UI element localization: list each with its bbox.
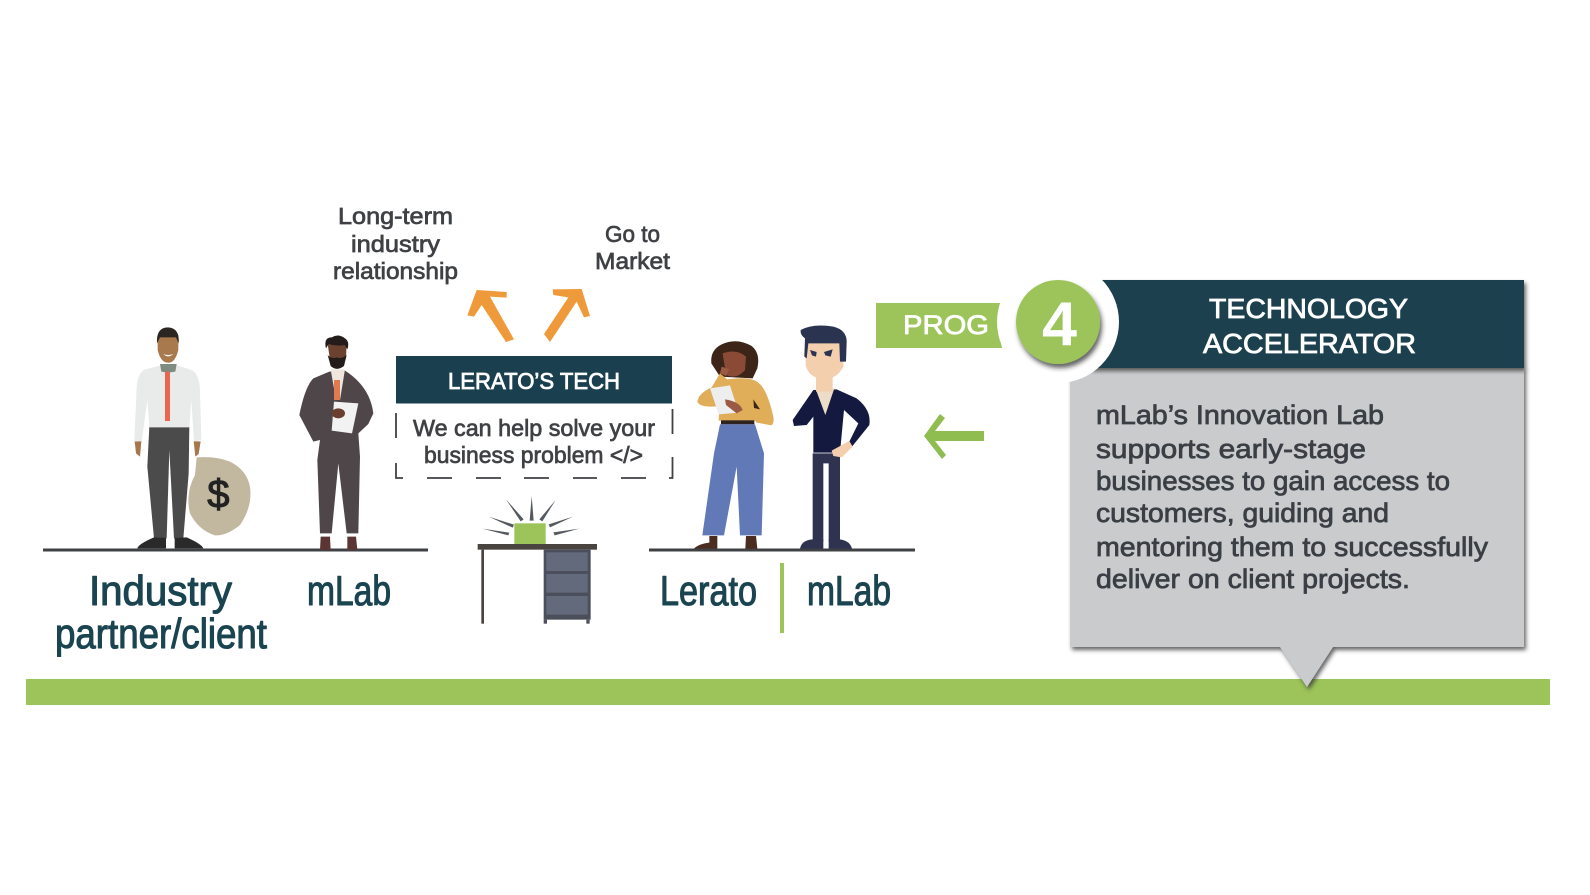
hands xyxy=(135,441,201,457)
head xyxy=(327,342,347,364)
suit xyxy=(299,371,373,533)
sweater fold xyxy=(753,399,760,409)
smile xyxy=(163,354,173,356)
hair xyxy=(801,326,847,362)
belt xyxy=(721,420,754,424)
label: mLab left: mLab xyxy=(307,567,391,614)
shoes xyxy=(320,537,357,550)
feet xyxy=(694,536,757,549)
text: long-term industry relationship: relationship xyxy=(333,258,458,284)
title: TECHNOLOGY xyxy=(1209,293,1408,324)
arrow: green left xyxy=(924,414,984,459)
hand xyxy=(332,408,345,418)
shirt xyxy=(817,388,834,415)
body text: supports early-stage xyxy=(1096,434,1366,464)
banner: PROG: PROG xyxy=(903,310,989,340)
green baseline bar xyxy=(26,679,1550,705)
green box xyxy=(514,523,546,544)
shoes xyxy=(137,537,203,548)
label: mLab right: mLab xyxy=(807,567,891,614)
dashed box xyxy=(396,409,672,478)
shirt and tie xyxy=(331,369,345,400)
body text: deliver on client projects. xyxy=(1096,564,1410,594)
label: Industry partner/client xyxy=(55,567,267,657)
label: Industry partner/client: Industry xyxy=(89,567,232,614)
text: go to market: Go to xyxy=(605,221,660,247)
body text: customers, guiding and xyxy=(1096,498,1389,528)
neck xyxy=(816,375,833,392)
hand xyxy=(832,441,853,457)
face xyxy=(723,351,746,377)
jacket xyxy=(793,389,870,453)
text: we can help: We can help solve your xyxy=(413,415,655,441)
arrow: up right xyxy=(544,289,590,342)
header: Lerato's tech: LERATO’S TECH xyxy=(448,368,620,394)
panel: technology accelerator callout xyxy=(1070,280,1524,687)
notepad xyxy=(710,385,739,414)
dark header xyxy=(1090,280,1524,368)
divider: green xyxy=(780,563,784,633)
figure: mLab man in suit xyxy=(299,336,373,550)
title xyxy=(1203,293,1416,359)
text: long-term industry relationship: industry xyxy=(351,231,441,257)
rays xyxy=(482,496,579,535)
hair xyxy=(711,341,758,378)
pants xyxy=(147,427,189,538)
head xyxy=(158,335,178,363)
pants xyxy=(702,424,764,535)
text: long-term industry relationship: Long-term xyxy=(338,203,453,229)
figure: industry partner with money bag xyxy=(134,327,250,548)
shirt xyxy=(134,365,201,442)
pants xyxy=(813,453,840,542)
ground line: left xyxy=(43,548,428,552)
ground line: right xyxy=(649,548,915,552)
arrows: orange up xyxy=(467,289,590,342)
money bag: $ xyxy=(207,472,229,516)
desk top xyxy=(478,544,597,550)
eyes xyxy=(810,349,833,357)
figure: Lerato xyxy=(694,341,774,549)
body text: businesses to gain access to xyxy=(1096,466,1450,496)
shoes xyxy=(800,539,852,549)
banner: PROG xyxy=(876,303,1002,348)
text: long-term industry relationship xyxy=(333,203,458,284)
body text: mLab’s Innovation Lab xyxy=(1096,400,1384,430)
title: ACCELERATOR xyxy=(1203,328,1416,359)
text: we can help xyxy=(413,415,655,468)
tie xyxy=(165,372,170,421)
hair xyxy=(325,336,348,349)
badge: number 4: 4 xyxy=(1042,290,1078,359)
desk with glowing green box xyxy=(478,496,597,624)
collar xyxy=(160,364,177,373)
sweater xyxy=(697,373,774,425)
body text xyxy=(1096,400,1489,594)
document xyxy=(332,402,358,433)
drawers xyxy=(544,550,591,620)
text: go to market xyxy=(595,221,671,274)
badge: number 4 xyxy=(997,261,1119,383)
figure: mLab man with navy jacket xyxy=(793,326,870,549)
hair xyxy=(157,327,179,343)
desk leg xyxy=(481,550,484,624)
grey callout body xyxy=(1070,367,1524,687)
label: Industry partner/client: partner/client xyxy=(55,610,267,657)
head xyxy=(806,342,844,379)
money bag xyxy=(188,457,250,535)
hand xyxy=(720,367,743,413)
text: go to market: Market xyxy=(595,248,671,274)
text: we can help: business problem </> xyxy=(424,442,643,468)
beard xyxy=(328,355,347,369)
label: Lerato: Lerato xyxy=(660,567,757,614)
header: Lerato's tech xyxy=(396,356,672,404)
body text: mentoring them to successfully xyxy=(1096,532,1489,562)
arrow: up left xyxy=(467,290,514,342)
